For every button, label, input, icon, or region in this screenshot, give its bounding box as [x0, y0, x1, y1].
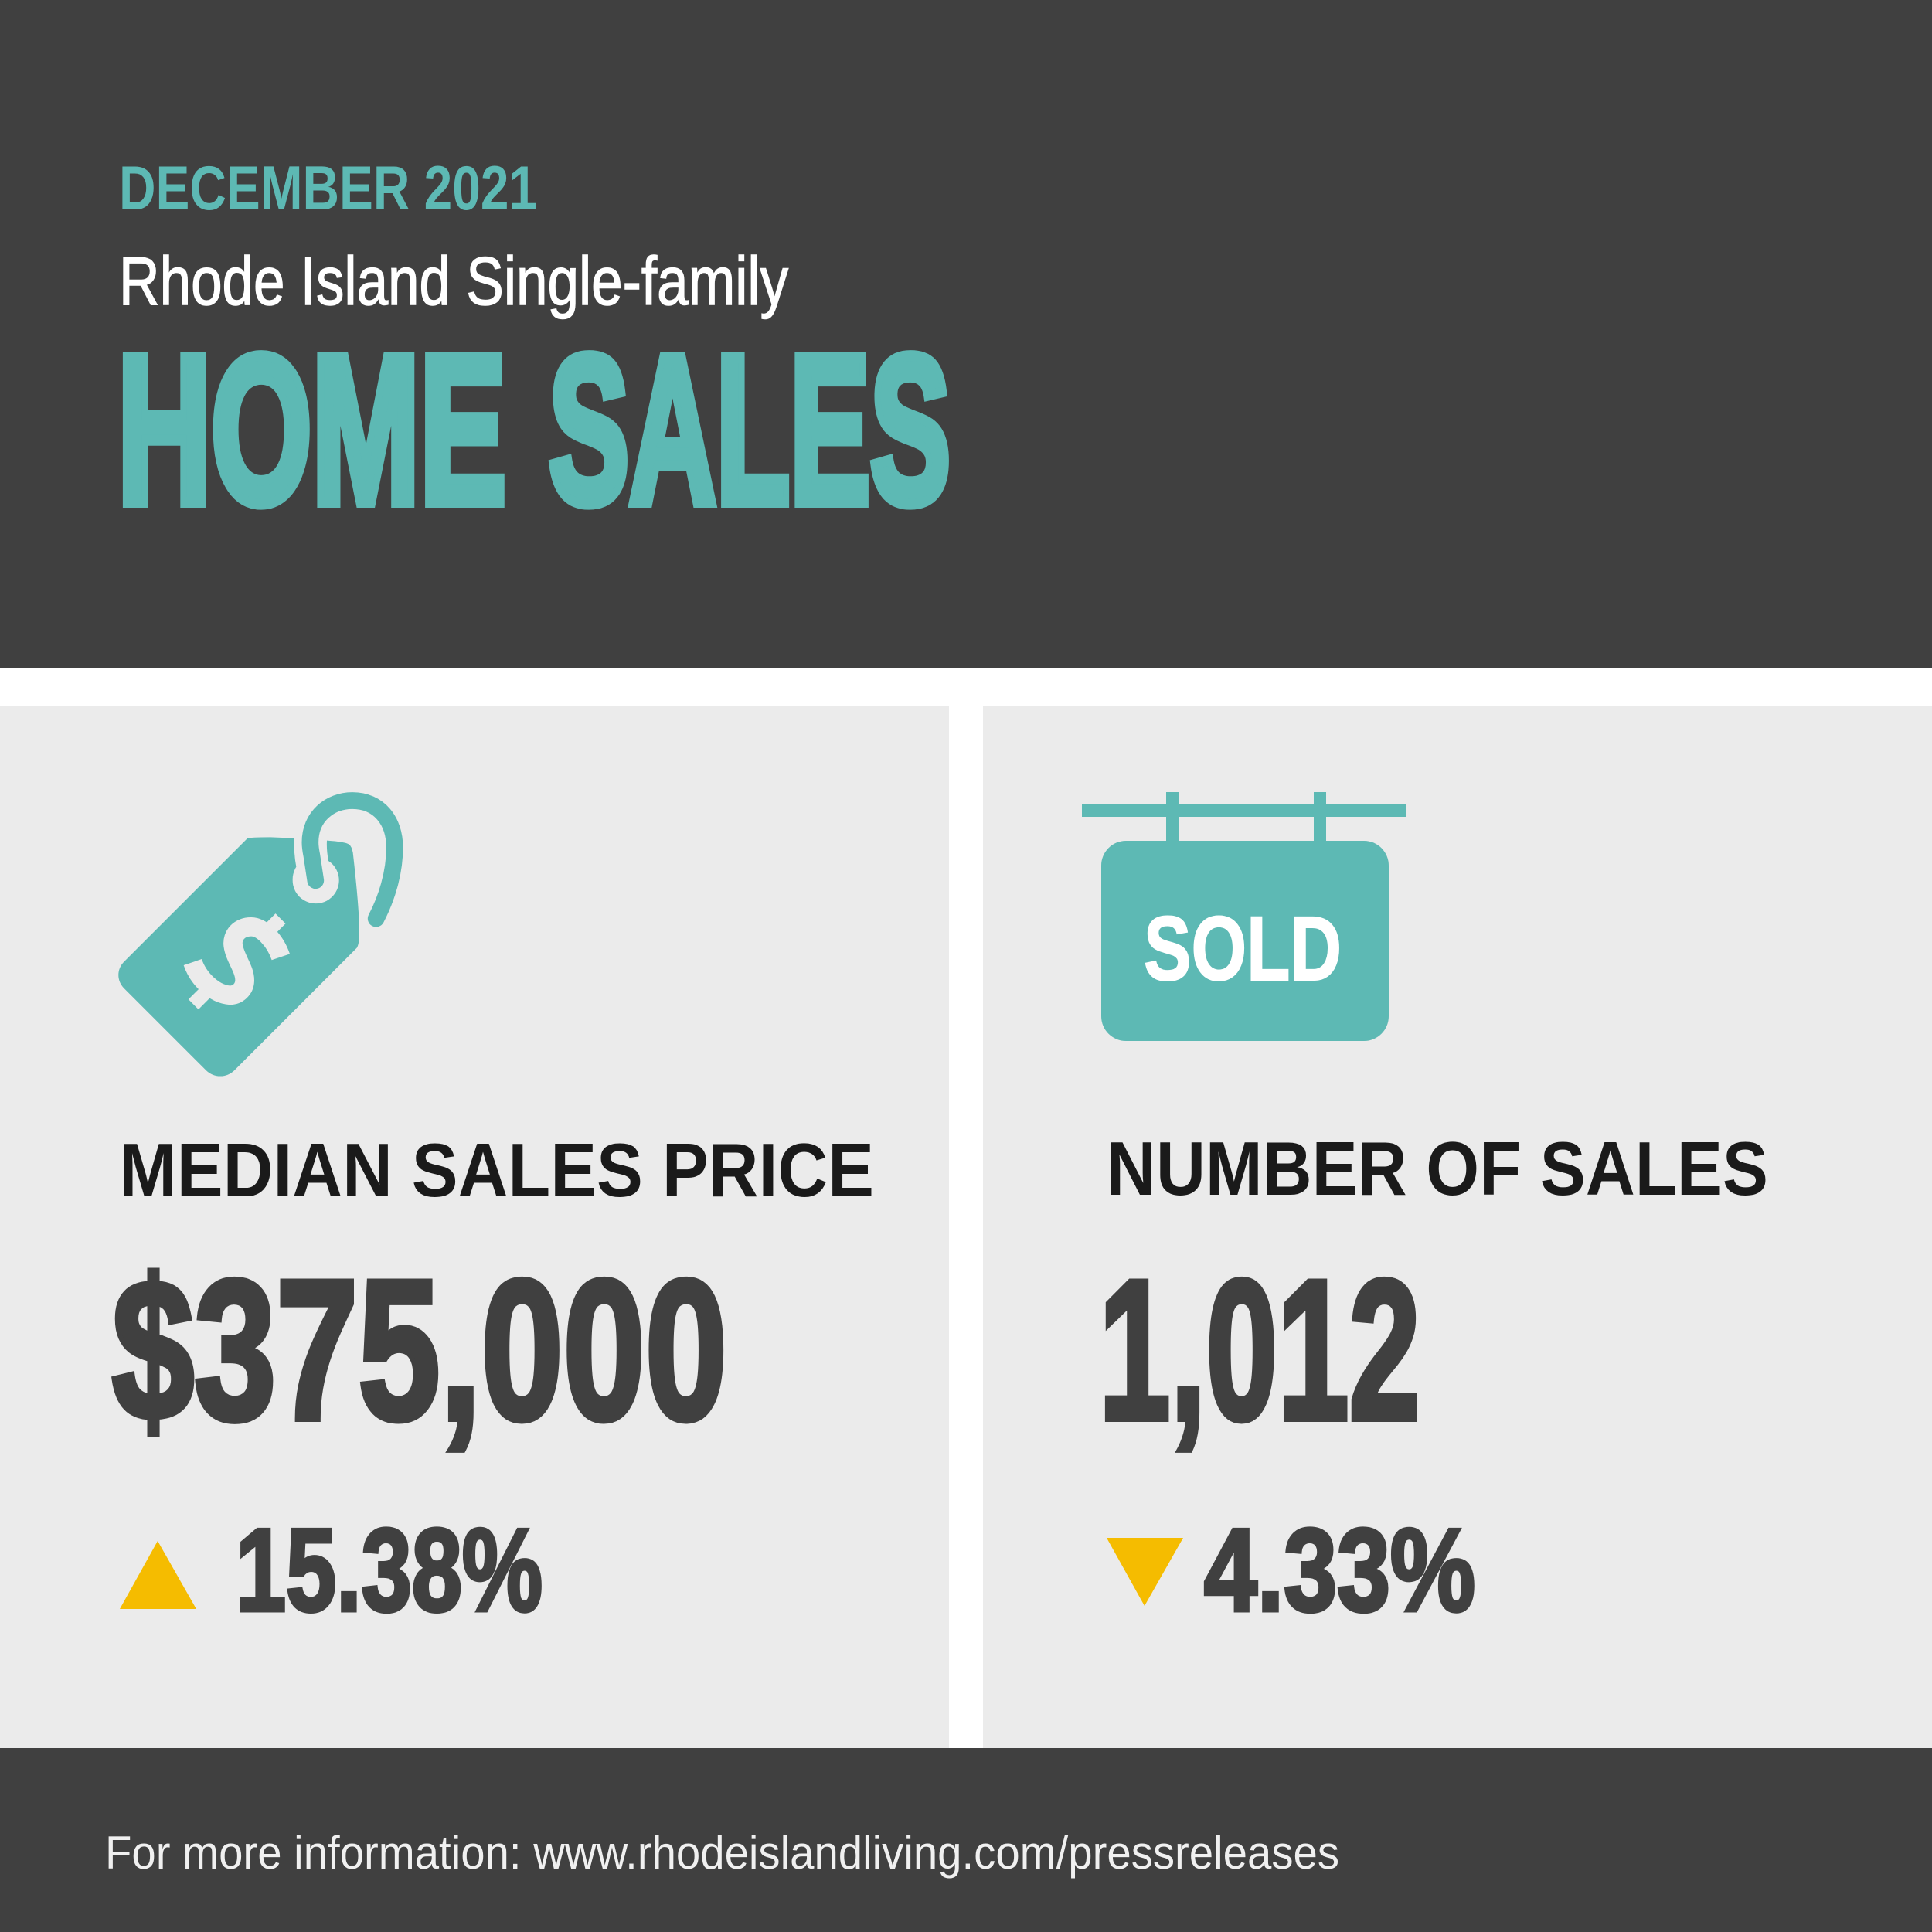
metric value: 1,012 [1099, 1238, 1420, 1461]
icon: up triangle [120, 1541, 196, 1609]
icon: price tag [118, 801, 395, 1077]
metric label: MEDIAN SALES PRICE [119, 1128, 874, 1213]
icon: down triangle [1107, 1538, 1183, 1606]
icon: sold sign: SOLD [1144, 898, 1342, 1000]
subtitle: Rhode Island Single-family [119, 243, 788, 319]
footer text: For more information: www.rhodeislandliving.com/pressreleases [105, 1827, 1339, 1879]
title: SALES [549, 312, 951, 547]
panel: median sales price [0, 706, 949, 1748]
metric label: NUMBER OF SALES [1107, 1126, 1768, 1211]
panel: header [0, 0, 1932, 668]
icon: sold sign [1082, 792, 1406, 1041]
percent change: 15.38% [236, 1505, 543, 1636]
title: HOME [117, 312, 506, 547]
panel: footer [0, 1748, 1932, 1932]
percent change: 4.33% [1204, 1505, 1475, 1636]
date heading: DECEMBER 2021 [119, 154, 537, 223]
metric value: $375,000 [112, 1238, 727, 1461]
panel: number of sales [983, 706, 1932, 1748]
